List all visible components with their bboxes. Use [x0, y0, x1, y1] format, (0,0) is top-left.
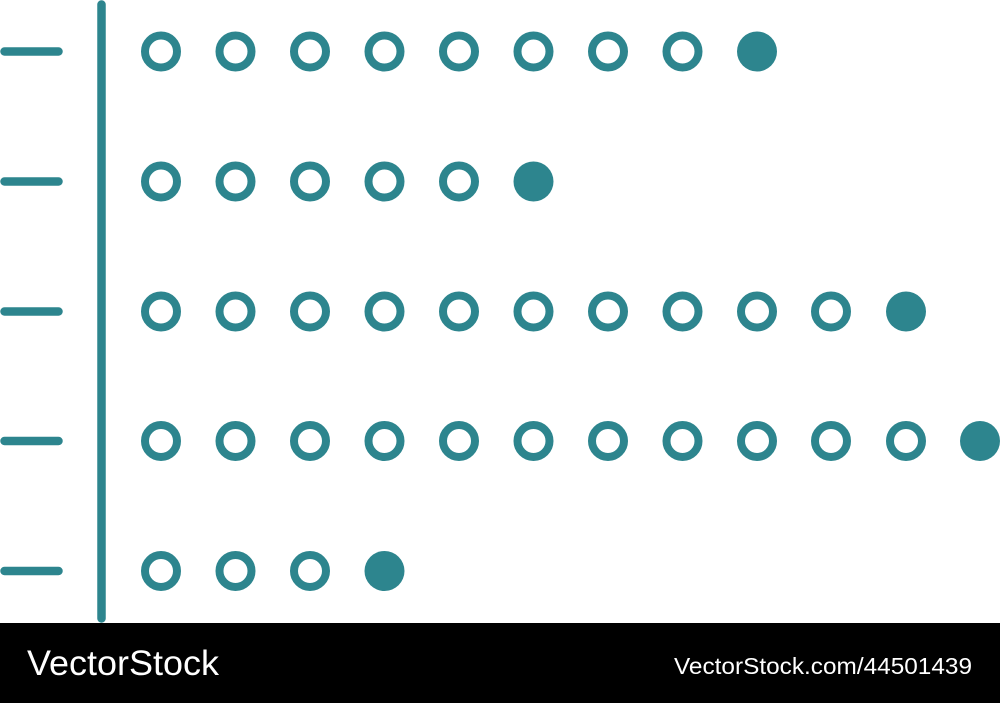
footer brand name: VectorStock	[27, 644, 220, 683]
row 4: tick and 12 dots	[4, 421, 1000, 461]
footer bar	[0, 623, 1000, 703]
row 5: tick and 4 dots	[4, 551, 404, 591]
footer image reference: VectorStock.com/44501439	[674, 653, 972, 679]
row 1: tick and 9 dots	[4, 32, 777, 72]
row 3: tick and 11 dots	[4, 292, 926, 332]
vertical axis line	[97, 4, 106, 618]
row 2: tick and 6 dots	[4, 162, 554, 202]
